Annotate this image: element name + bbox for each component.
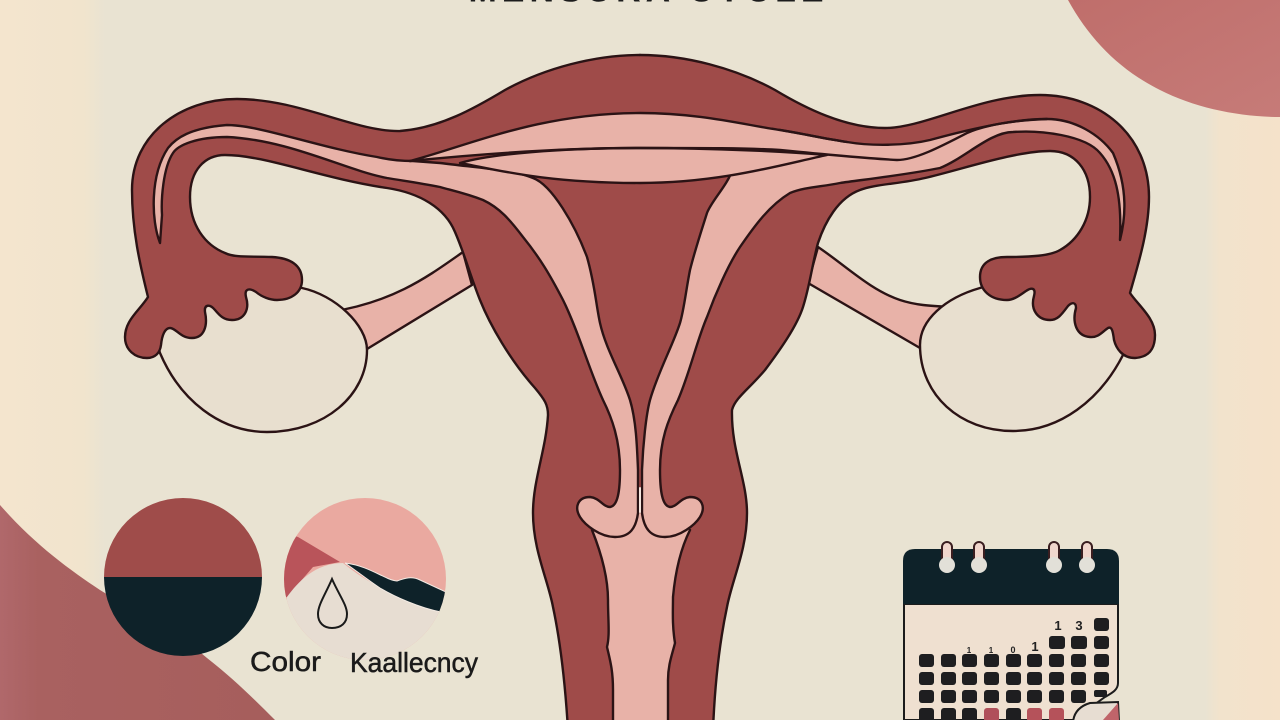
dark band: [345, 563, 446, 612]
label: Frequency (garbled in source): Kaallecncy: [350, 647, 478, 678]
day numbers: 1: [967, 646, 972, 655]
icon: calendar: [903, 542, 1119, 720]
circle: flow swatch with drop: [270, 498, 446, 660]
day numbers: 1: [1031, 639, 1039, 654]
red wedge: [284, 536, 340, 598]
uterus body right half: [640, 55, 1155, 720]
page curl: [1073, 702, 1119, 720]
calendar header: [903, 549, 1119, 604]
curl red corner: [1103, 703, 1119, 720]
left ligament: [330, 252, 472, 356]
calendar page: [904, 604, 1118, 720]
right fallopian tube and lining: [642, 119, 1124, 537]
left fallopian tube and lining: [154, 125, 638, 537]
uterine cavity lower lens: [460, 148, 827, 183]
vaginal canal: [592, 490, 690, 720]
cream lower area: [284, 563, 446, 660]
right ligament: [808, 247, 950, 356]
day numbers: 3: [1075, 618, 1083, 633]
uterine cavity upper lens: [410, 113, 847, 161]
icon: water drop: [318, 579, 347, 628]
day numbers: 1: [1054, 618, 1062, 633]
right ovary: [920, 270, 1130, 431]
label: Color: Color: [250, 646, 321, 677]
cavity centre line continuing into right tube: [410, 119, 1047, 161]
uterus body left half: [125, 55, 640, 720]
circle: colour swatch: [104, 498, 262, 656]
binder rings: [939, 542, 1095, 573]
uterus anatomy diagram: [125, 55, 1155, 720]
day numbers: 1: [989, 646, 994, 655]
decorative blob: top right: [1068, 0, 1280, 117]
cervical opening: [639, 488, 641, 512]
day numbers: 0: [1010, 645, 1016, 655]
left ovary: [150, 270, 367, 432]
day numbers: [967, 618, 1083, 655]
day grid: [919, 618, 1109, 720]
decorative blob: bottom left: [0, 505, 275, 720]
